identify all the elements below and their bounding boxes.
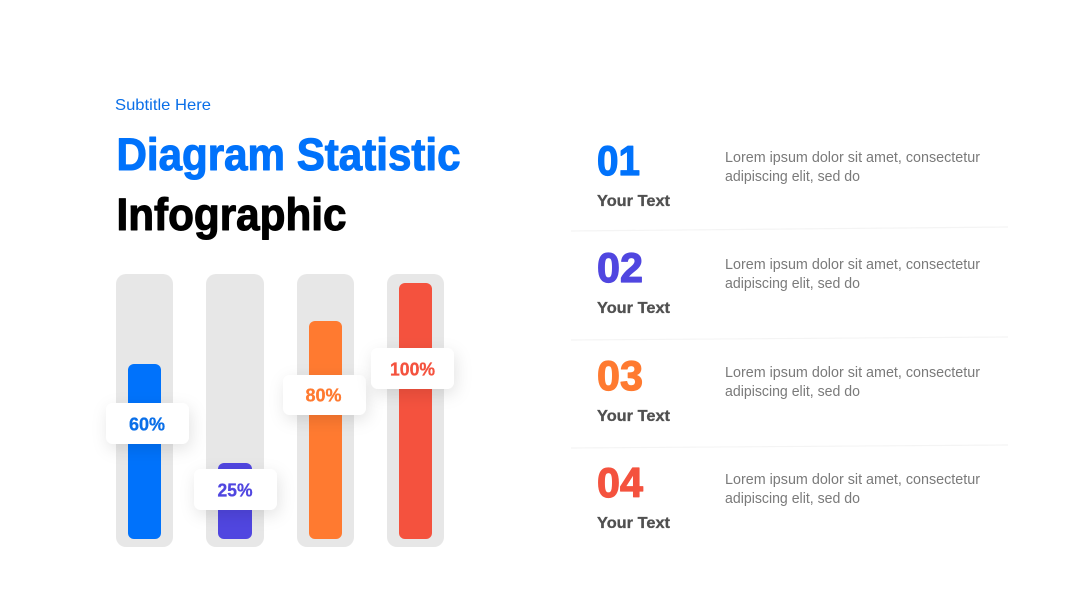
item 02: Your Text [597,300,671,317]
item 03: Your Text [597,408,671,425]
label: 60% [106,403,189,444]
bar: 60% [116,274,173,547]
bar: 80% [297,274,354,547]
item 03: adipiscing elit, sed do [725,384,860,400]
label: 25% [194,469,277,510]
label: 100%: 100% [390,360,435,380]
item 01: 01 [597,137,640,184]
item 02: adipiscing elit, sed do [725,276,860,292]
bar: 100% [387,274,444,547]
label: 100% [371,348,454,389]
item 03 [597,352,980,425]
item 03: 03 [597,352,643,399]
item 01: Your Text [597,193,671,210]
item 01 [597,137,980,210]
item 03: Lorem ipsum dolor sit amet, consectetur [725,365,980,381]
title: Infographic [116,189,346,240]
title [116,129,460,240]
item 01: Lorem ipsum dolor sit amet, consectetur [725,150,980,166]
item 04 [597,459,980,532]
subtitle: Subtitle Here [115,97,211,114]
bar: 25% [206,274,264,547]
item 02: 02 [597,244,643,291]
label: 60%: 60% [129,414,165,434]
item 04: 04 [597,459,644,506]
item 01: adipiscing elit, sed do [725,169,860,185]
bar chart [106,274,454,547]
label: 25%: 25% [218,480,252,500]
item 04: adipiscing elit, sed do [725,491,860,507]
title: Diagram Statistic [116,129,460,180]
item 02 [597,244,980,317]
label: 80%: 80% [306,386,342,406]
label: 80% [283,375,366,415]
item 02: Lorem ipsum dolor sit amet, consectetur [725,257,980,273]
item 04: Lorem ipsum dolor sit amet, consectetur [725,472,980,488]
item 04: Your Text [597,515,671,532]
